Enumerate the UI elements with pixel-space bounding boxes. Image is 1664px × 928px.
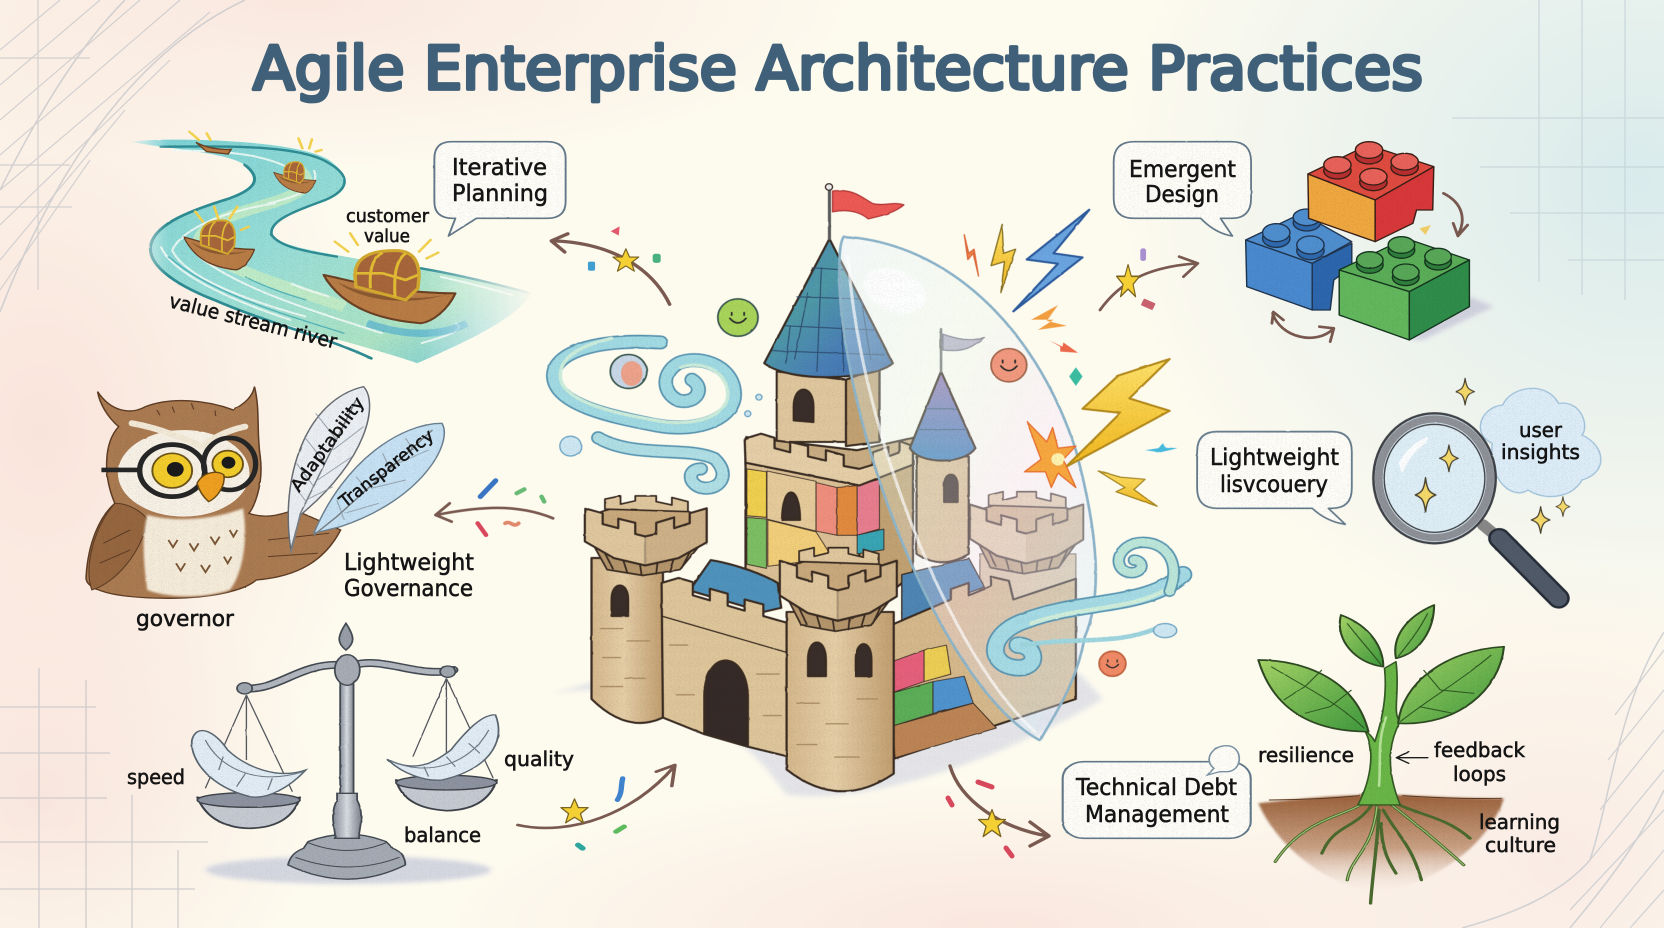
practice: Lightweight Discovery, magnifying glass [1197,378,1601,598]
label: learning culture [1479,810,1560,857]
owl glasses [101,438,256,497]
main spire [764,184,904,377]
title: Agile Enterprise Architecture Practices [253,34,1423,104]
label: user insights [1501,418,1580,464]
label: value stream river: value stream river [167,289,340,354]
feedback arrow [1396,752,1428,763]
green block [1339,237,1469,340]
owl body [86,387,341,598]
label: Planning: Planning [452,181,548,207]
label: balance: balance [404,823,481,847]
floating bubbles [560,394,1177,638]
sparkles [1440,445,1458,472]
speech bubble: Iterative Planning [434,142,566,236]
left roof [692,560,781,612]
arrow with confetti: to Emergent Design [1100,248,1198,310]
speech bubble: Lightweight Discovery [1197,432,1352,524]
turret inside bubble [910,329,984,562]
value stream river [130,140,532,363]
soil [1258,795,1504,892]
back tower [970,492,1083,707]
practice: Iterative Planning, value stream river [130,132,670,363]
magnifier handle [1483,525,1501,540]
ground shadow [549,658,1103,797]
smiley faces [610,299,1126,676]
small thought bubble [1208,746,1239,775]
background sketch: bottom-left grid [0,668,208,928]
gold rays [189,132,438,258]
scale stand [288,834,405,879]
label: Design: Design [1145,182,1219,208]
label: Emergent: Emergent [1129,157,1236,183]
label: speed: speed [127,765,185,789]
label: user insights: insights [1501,440,1580,464]
leaves [1258,605,1504,732]
soap bubble shield [839,237,1096,740]
block arrows [1272,193,1468,342]
background sketch: top-right grid [1452,0,1664,300]
block shadow [1409,297,1494,340]
blue block [1246,209,1352,310]
label: resilience: resilience [1258,743,1354,767]
label: user insights: user [1519,418,1563,442]
label: Lightweight: Lightweight [344,550,474,576]
red block [1308,142,1434,242]
arrow with confetti: to Technical Debt Management [948,766,1049,856]
label: lisvcouery: lisvcouery [1220,472,1328,498]
label: customer value [346,206,430,247]
arrow with confetti: toward castle [518,765,675,848]
feathers [288,387,370,550]
label: quality: quality [504,747,574,771]
background sketch: bottom-right curves and hatching [1462,632,1664,928]
right roof and wall with colour blocks [892,558,1076,759]
label: Lightweight: Lightweight [1210,445,1339,471]
arrow with confetti: to Iterative Planning [551,226,670,304]
curtain wall with arch [662,578,792,757]
roots [1275,800,1470,903]
label: Technical Debt: Technical Debt [1075,775,1237,801]
insights cloud [1480,388,1601,497]
practice: Lightweight Governance, owl [86,387,553,632]
central keep [745,367,913,616]
left tower [585,496,707,723]
right pan and feather [396,780,497,811]
arrow with confetti: to Lightweight Governance [436,481,553,535]
lightning bolts [964,210,1178,506]
practice: Emergent Design, building blocks [1100,142,1494,342]
front tower [780,548,897,791]
magnifier lens [1373,413,1496,543]
label: Management: Management [1085,802,1229,828]
label: customer value: value [364,226,410,247]
speech bubble: Emergent Design [1114,142,1251,236]
scale shadow [205,856,491,884]
castle with soap bubble shield [549,184,1183,797]
label: feedback loops [1434,738,1525,786]
label: feedback loops: loops [1453,762,1506,786]
label: Iterative: Iterative [452,155,547,181]
label: learning culture: learning [1479,810,1560,834]
treasure boats [323,251,455,323]
left pan and feather [197,797,300,828]
label: customer value: customer [346,206,430,227]
label: learning culture: culture [1485,833,1556,857]
label: feedback loops: feedback [1434,738,1525,762]
scale strings [205,678,493,792]
scale beam [243,663,453,689]
label: Adaptability: Adaptability [287,394,369,496]
label: Transparency: Transparency [335,426,438,513]
owl wing and head feathers [89,403,216,590]
speech bubble: Technical Debt Management [1063,762,1251,838]
practice: balance scale [127,623,675,884]
owl chest [144,508,245,596]
background sketch: top-left hatching and grid [0,0,245,312]
wind swirls [554,338,1183,668]
practice: Technical Debt Management, growing plant [948,605,1560,903]
stem [1358,662,1400,805]
label: governor: governor [136,607,235,632]
owl face [118,430,250,517]
label: Governance: Governance [344,576,473,602]
